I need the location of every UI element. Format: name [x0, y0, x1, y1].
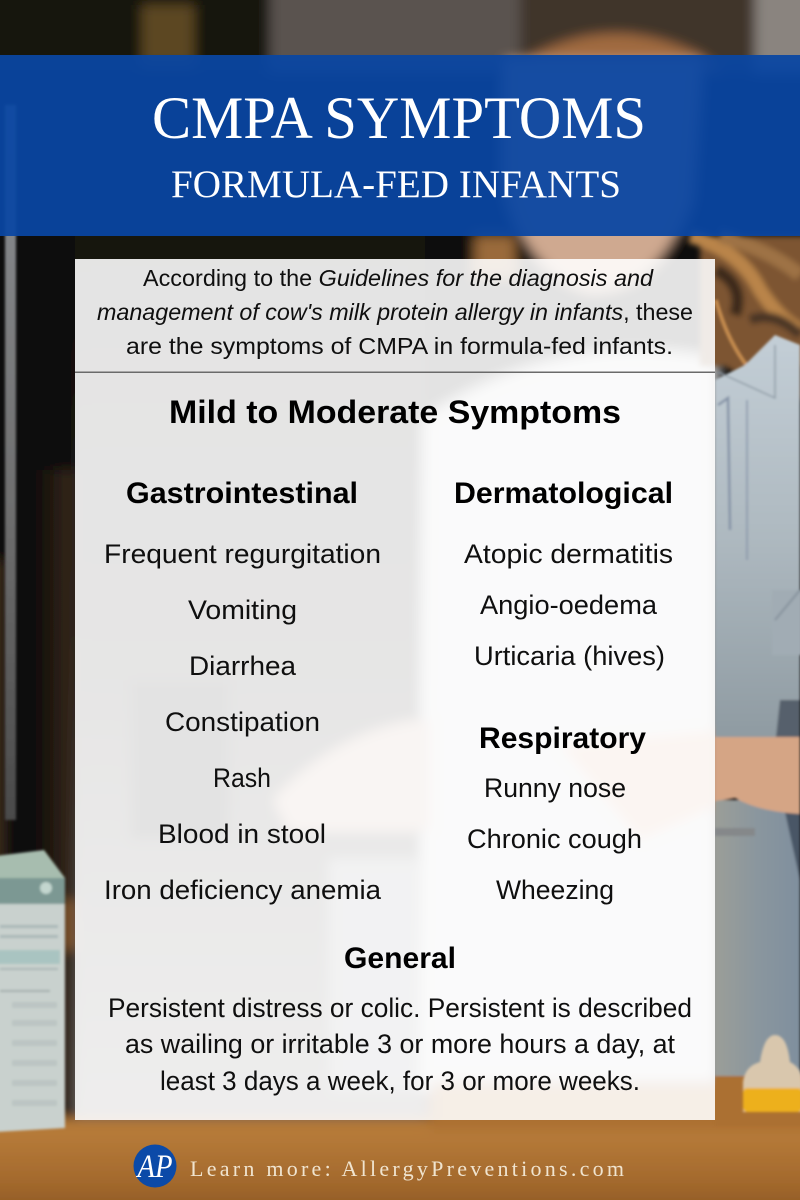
column: gastrointestinal: Iron deficiency anemia: [104, 875, 381, 905]
subtitle: FORMULA-FED INFANTS: [171, 163, 621, 206]
heading: severity: Mild to Moderate Symptoms: [169, 394, 621, 430]
intro text: are the symptoms of CMPA in formula-fed infants.: [126, 333, 673, 359]
column: respiratory: [467, 722, 647, 905]
title: CMPA SYMPTOMS: [152, 85, 646, 151]
column: respiratory: Wheezing: [496, 875, 614, 905]
column: gastrointestinal: Vomiting: [188, 595, 297, 625]
heading: dermatological: Dermatological: [454, 477, 673, 510]
column: respiratory: Runny nose: [484, 773, 626, 803]
section: general: least 3 days a week, for 3 or more weeks.: [160, 1066, 640, 1096]
header banner: [0, 55, 800, 236]
intro text: According to the Guidelines for the diagnosis and: [143, 265, 654, 291]
heading: general: General: [344, 942, 456, 975]
intro text: management of cow's milk protein allergy in infants, these: [97, 299, 693, 325]
shirt: [715, 335, 800, 737]
intro text: [97, 265, 693, 359]
column: gastrointestinal: Rash: [213, 763, 271, 793]
column: dermatological: Urticaria (hives): [474, 641, 665, 671]
section: general: Persistent distress or colic. Persistent is described: [108, 993, 692, 1023]
column: gastrointestinal: Diarrhea: [189, 651, 296, 681]
column: dermatological: Atopic dermatitis: [464, 539, 673, 569]
heading: gastrointestinal: Gastrointestinal: [126, 477, 358, 510]
heading: respiratory: Respiratory: [479, 722, 647, 755]
footer: [134, 1144, 624, 1188]
column: gastrointestinal: Frequent regurgitation: [104, 539, 381, 569]
section: general: as wailing or irritable 3 or more hours a day, at: [125, 1029, 676, 1059]
column: gastrointestinal: Constipation: [165, 707, 320, 737]
column: respiratory: Chronic cough: [467, 824, 642, 854]
column: gastrointestinal: [104, 477, 381, 905]
baby bottle: [743, 1035, 800, 1112]
column: dermatological: [454, 477, 673, 671]
hair: [700, 236, 800, 366]
section: general: [108, 942, 692, 1096]
column: gastrointestinal: Blood in stool: [158, 819, 326, 849]
formula box: [0, 850, 65, 1132]
icon: AP logo: AP: [136, 1149, 172, 1185]
footer link text: Learn more: AllergyPreventions.com: [190, 1156, 624, 1181]
panel: symptoms card: [75, 259, 715, 1120]
column: dermatological: Angio-oedema: [480, 590, 657, 620]
